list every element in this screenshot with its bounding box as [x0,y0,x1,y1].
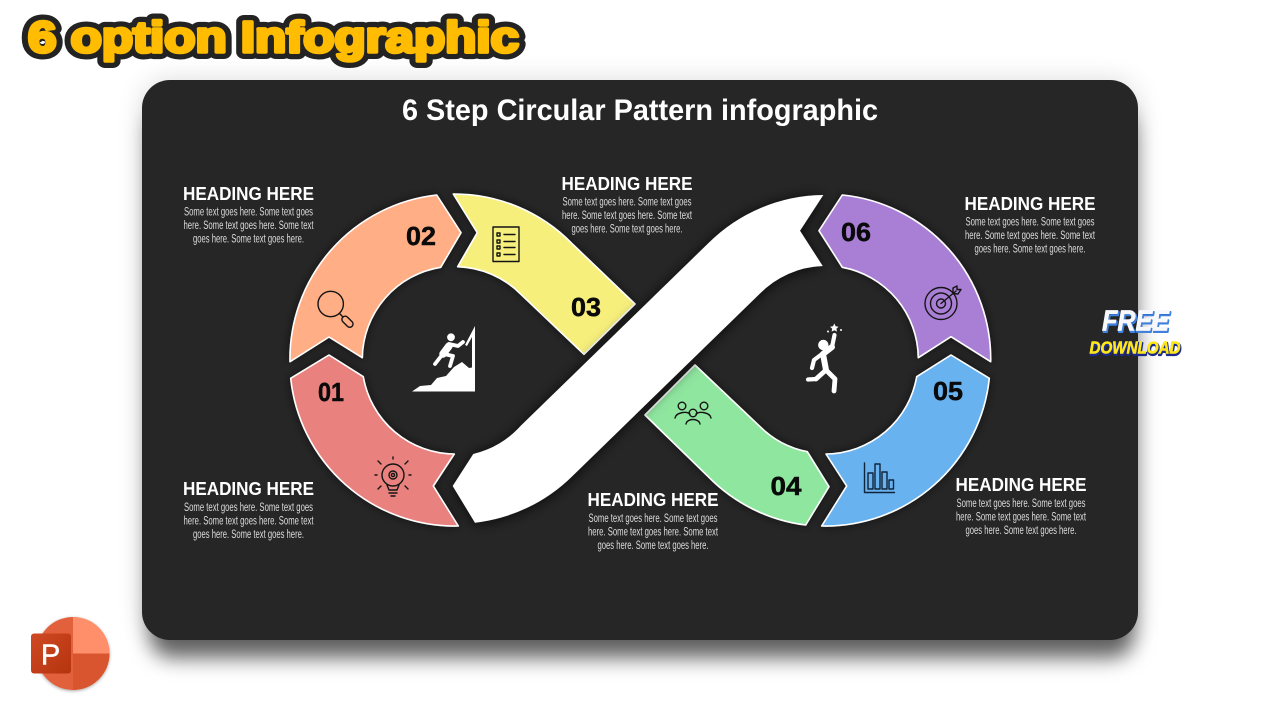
text block: 02: goes here. Some text goes here. [193,234,304,246]
text block: 03: HEADING HERE [562,174,692,194]
text block: 05: Some text goes here. Some text goes [956,498,1086,510]
text block: 04 [588,490,719,552]
icon: climber on mountain [412,326,475,392]
text block: 04: Some text goes here. Some text goes [588,513,718,525]
segment 05: blue arc: 05 [933,376,963,406]
text block: 01: goes here. Some text goes here. [193,529,304,541]
text block: 02: HEADING HERE [183,184,314,204]
text block: 03: goes here. Some text goes here. [572,224,682,236]
segment 01: red arc: 01 [318,377,344,407]
icon: target with arrow [925,286,961,320]
text block: 01 [183,479,314,541]
panel: dark rounded background [142,80,1138,640]
segment 06: purple arc [819,195,991,362]
segment 03: yellow arc [453,194,635,354]
badge: free download: DOWNLOAD [1090,338,1181,358]
icon: PowerPoint logo [31,617,110,690]
text block: 06: HEADING HERE [964,194,1096,214]
text block: 04: HEADING HERE [588,490,718,510]
text block: 03: here. Some text goes here. Some text [562,210,693,222]
segment 04: green arc: 04 [770,471,802,501]
badge: free download: FREE [1102,306,1170,338]
badge: free download [1090,306,1181,359]
main title: 6 option Infographic: 6 option Infographic [28,13,519,62]
segment 05: blue arc [822,355,989,526]
segment: white connecting band [453,195,823,523]
segment 02: orange arc [290,195,461,362]
text block: 02: here. Some text goes here. Some text [184,220,314,232]
icon: bar chart [864,463,894,492]
text block: 01: here. Some text goes here. Some text [184,516,314,528]
icon: magnifier [318,291,354,329]
text block: 06: Some text goes here. Some text goes [966,216,1095,228]
icon: PowerPoint logo: P [41,640,60,672]
text block: 01: Some text goes here. Some text goes [184,502,313,514]
icon: lightbulb [375,457,411,496]
text block: 03: Some text goes here. Some text goes [562,196,692,208]
text block: 06: goes here. Some text goes here. [974,244,1086,256]
text block: 02 [183,184,314,246]
text block: 06 [964,194,1096,256]
main title: 6 option Infographic: 6 option Infographic [28,13,519,62]
text block: 05: here. Some text goes here. Some text [956,512,1087,524]
icon: person reaching for star [808,324,842,391]
text block: 05: goes here. Some text goes here. [966,525,1076,537]
icon: three people [675,402,711,424]
text block: 03 [562,174,693,236]
badge: free download: DOWNLOAD [1090,339,1181,359]
text block: 04: here. Some text goes here. Some text [588,526,719,538]
text block: 06: here. Some text goes here. Some text [965,230,1096,242]
badge: free download: FREE [1103,307,1171,339]
segment 02: orange arc: 02 [406,221,436,251]
segment 01: red arc [291,355,458,526]
text block: 04: goes here. Some text goes here. [598,540,708,552]
text block: 01: HEADING HERE [183,479,314,499]
text block: 05 [956,475,1087,537]
panel heading: 6 Step Circular Pattern infographic [402,94,878,127]
segment 06: purple arc: 06 [841,217,871,247]
icon: checklist document [493,227,519,262]
text block: 05: HEADING HERE [956,475,1086,495]
segment 03: yellow arc: 03 [571,292,601,322]
text block: 02: Some text goes here. Some text goes [184,206,313,218]
segment 04: green arc [645,365,829,525]
